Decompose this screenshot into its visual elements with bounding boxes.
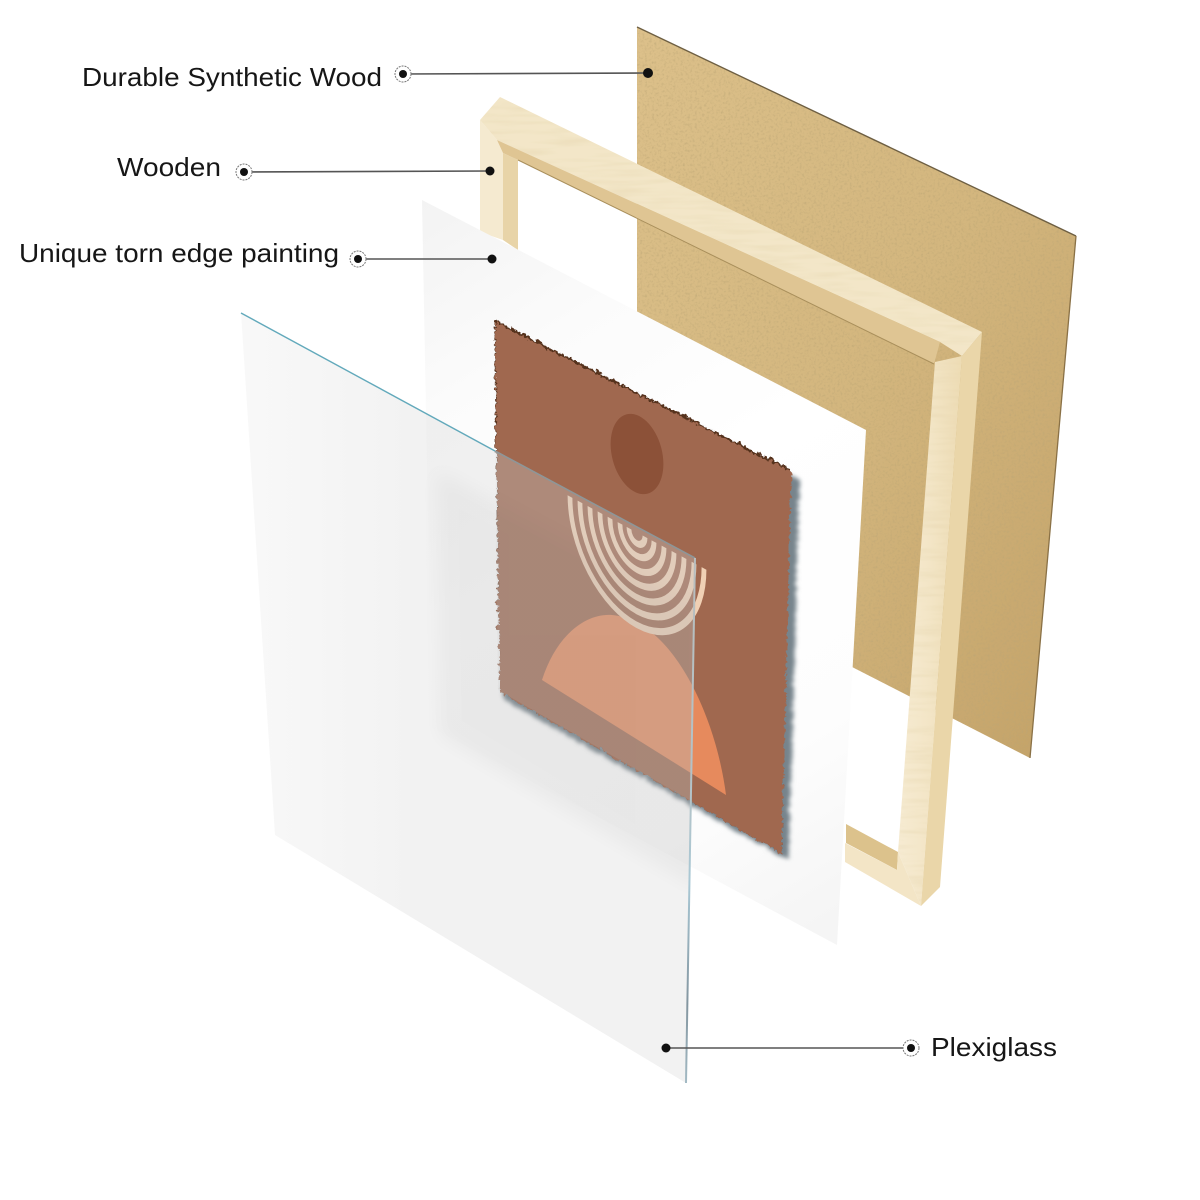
label: Plexiglass xyxy=(662,1032,1057,1062)
white mat xyxy=(422,200,866,945)
label: Wooden: Wooden xyxy=(117,152,221,182)
label: Unique torn edge painting xyxy=(19,238,496,268)
label: Wooden xyxy=(117,152,494,182)
label: Durable Synthetic Wood xyxy=(82,62,653,92)
wooden frame xyxy=(480,97,982,906)
exploded frame diagram xyxy=(21,26,1077,1083)
plexiglass sheet xyxy=(241,313,700,1083)
label: Unique torn edge painting: Unique torn edge painting xyxy=(19,238,339,268)
label: Durable Synthetic Wood: Durable Synthetic Wood xyxy=(82,62,382,92)
painting drop shadow xyxy=(498,327,798,859)
label: Plexiglass: Plexiglass xyxy=(931,1032,1057,1062)
peach half disc xyxy=(542,615,726,795)
backing board: durable synthetic wood xyxy=(637,27,1076,758)
torn edge painting xyxy=(493,318,790,852)
concentric rainbow arcs xyxy=(570,497,704,661)
oval sun xyxy=(602,408,672,500)
